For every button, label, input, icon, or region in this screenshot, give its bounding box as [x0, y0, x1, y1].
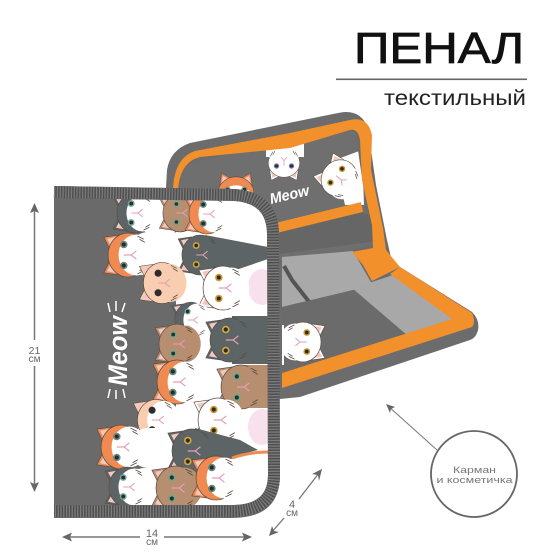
- lower cat: [282, 322, 326, 365]
- flap Meow lettering: Meow: [268, 182, 312, 208]
- title: ПЕНАЛ: [354, 24, 524, 73]
- cats illustration: [97, 193, 276, 510]
- lower pocket: [282, 294, 411, 374]
- dimension: depth 4 cm: см: [286, 508, 298, 519]
- dimension: height 21 cm: см: [29, 354, 41, 365]
- dimension: height 21 cm: [29, 203, 41, 492]
- callout: pocket and cosmetic bag: и косметичка: [436, 475, 513, 486]
- stitched edge: [54, 192, 274, 511]
- dimension: depth 4 cm: 4: [289, 499, 295, 511]
- orange zipper: [173, 119, 474, 388]
- subtitle: текстильный: [384, 87, 526, 110]
- front cover: [54, 186, 280, 518]
- callout: pocket and cosmetic bag: Карман: [453, 465, 496, 476]
- Meow lettering: Meow: [103, 314, 133, 386]
- flap pocket: [277, 212, 377, 254]
- dimension: width 14 cm: см: [146, 537, 158, 548]
- strap: [284, 266, 310, 303]
- dimension: height 21 cm: 21: [29, 345, 40, 357]
- lining upper: [282, 251, 372, 307]
- flap cats: [218, 144, 364, 205]
- lining lower: [352, 272, 466, 341]
- callout arrow: [386, 404, 437, 450]
- dimension: width 14 cm: 14: [146, 528, 158, 540]
- upper flap inner: [218, 144, 364, 205]
- dimension: depth 4 cm: [269, 469, 322, 536]
- dimension: width 14 cm: [62, 528, 252, 548]
- open pencil case: [165, 112, 478, 400]
- callout: pocket and cosmetic bag: [386, 404, 517, 517]
- pocket zip: [276, 207, 362, 228]
